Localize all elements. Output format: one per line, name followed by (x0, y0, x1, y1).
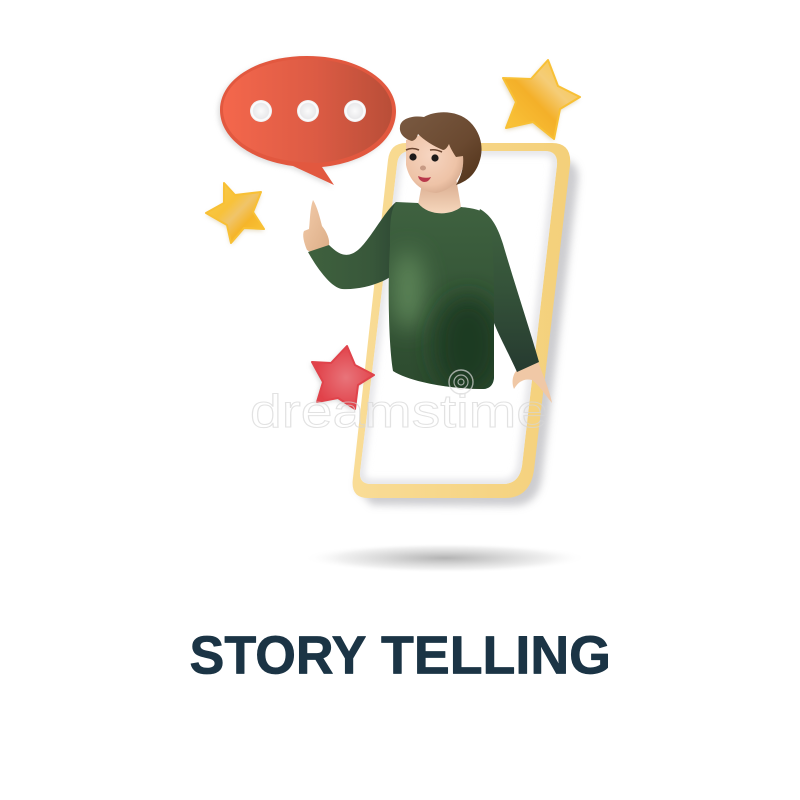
sweater body (388, 202, 494, 389)
mouth (418, 176, 431, 182)
title: STORY (190, 626, 366, 686)
star: red (310, 346, 374, 411)
left arm (308, 202, 400, 289)
head (406, 128, 464, 193)
star: left gold (206, 183, 264, 245)
eyes (406, 148, 442, 162)
right hand (513, 361, 552, 403)
right arm (470, 209, 539, 372)
bubble dots (250, 100, 366, 122)
infographic canvas (190, 56, 608, 674)
person (303, 112, 552, 403)
title: TELLING (381, 626, 611, 686)
hair (400, 112, 482, 185)
neck (418, 178, 461, 214)
watermark (250, 370, 548, 437)
watermark: dreamstime (250, 385, 548, 437)
phone (353, 143, 578, 506)
ground shadow (303, 543, 587, 573)
nose (420, 166, 426, 170)
raised hand (303, 200, 329, 252)
speech bubble (218, 56, 396, 187)
star: top right gold (502, 60, 580, 141)
